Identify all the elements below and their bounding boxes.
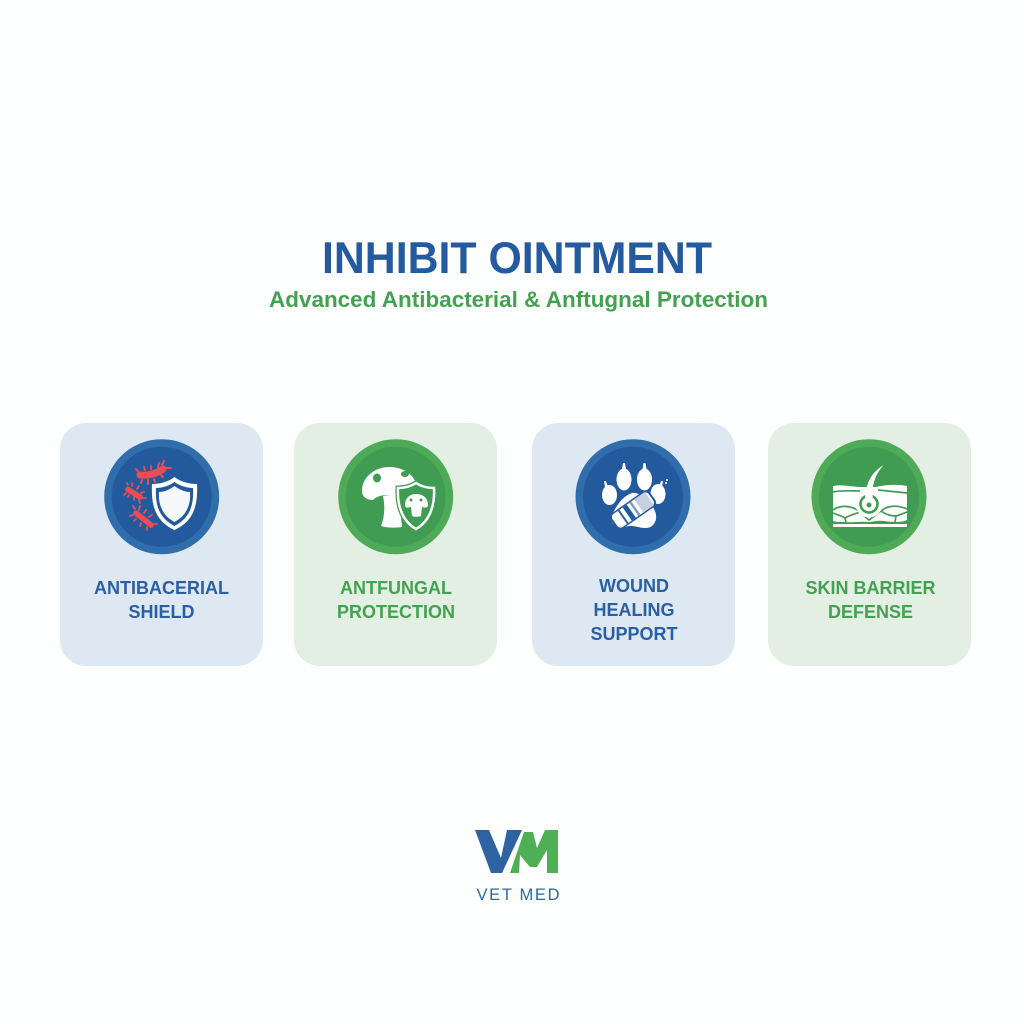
label: ANTIBACERIAL <box>94 578 229 598</box>
label: SKIN BARRIER <box>805 578 936 598</box>
follicle <box>856 490 882 518</box>
label: SUPPORT <box>590 624 678 644</box>
icon: shield and bacteria <box>104 439 219 554</box>
label: ANTFUNGAL <box>340 578 452 598</box>
logo wordmark: VET MED <box>476 886 560 904</box>
icon: bandaged paw <box>576 439 690 554</box>
label: SHIELD <box>128 602 195 622</box>
icon: skin layers and hair follicle <box>812 439 926 554</box>
panel: wound healing support <box>532 423 735 666</box>
label: HEALING <box>594 600 674 620</box>
card background <box>532 423 735 666</box>
card background <box>60 423 263 666</box>
card background <box>294 423 497 666</box>
panel: antibacterial shield <box>60 423 263 666</box>
panel: skin barrier defense <box>768 423 971 666</box>
card background <box>768 423 971 666</box>
panel: antifungal protection <box>294 423 497 666</box>
title: INHIBIT OINTMENT <box>322 234 712 283</box>
label: WOUND <box>599 576 669 596</box>
icon: mushroom and shield <box>338 439 453 554</box>
label: PROTECTION <box>337 602 455 622</box>
logo: VM monogram <box>475 830 558 873</box>
label: DEFENSE <box>828 602 913 622</box>
subtitle: Advanced Antibacterial & Anftugnal Protection <box>269 287 768 312</box>
